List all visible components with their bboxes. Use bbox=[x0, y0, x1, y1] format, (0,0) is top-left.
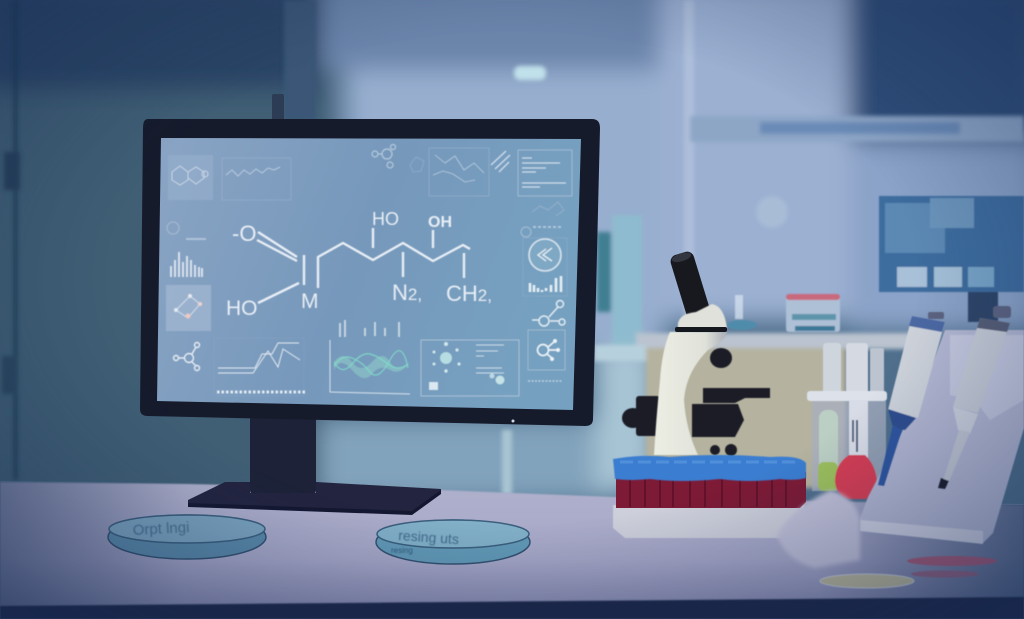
pipette left bbox=[878, 312, 945, 486]
dish label: resing uts bbox=[398, 527, 459, 547]
petri dish left bbox=[108, 515, 266, 559]
left screen widgets bbox=[166, 155, 291, 370]
microscope bbox=[622, 250, 770, 456]
petri dish right bbox=[376, 520, 530, 564]
molecule labels: HO bbox=[226, 297, 258, 320]
monitor bbox=[140, 119, 600, 426]
table bbox=[0, 482, 1024, 619]
top screen widgets bbox=[372, 144, 572, 216]
bottom screen charts bbox=[214, 320, 519, 396]
dish side label: resing bbox=[391, 546, 413, 555]
chemical structure bbox=[226, 209, 492, 320]
molecule labels: M bbox=[301, 290, 318, 313]
monitor frame bbox=[140, 119, 600, 426]
network panel bbox=[421, 340, 519, 396]
pipette stand bbox=[860, 330, 1024, 544]
molecule labels: CH2, bbox=[446, 281, 492, 306]
red samples bbox=[616, 472, 806, 508]
molecule bonds bbox=[257, 228, 470, 303]
monitor stand bbox=[188, 415, 441, 515]
dish label: Orpt lngi bbox=[132, 519, 190, 539]
power light bbox=[512, 420, 514, 422]
molecule labels: N2, bbox=[392, 280, 422, 305]
white cloth bbox=[777, 490, 860, 568]
blue caps bbox=[613, 455, 806, 481]
test tubes rack bbox=[807, 343, 887, 499]
molecule labels: -O bbox=[232, 221, 256, 246]
molecule labels: HO bbox=[372, 209, 399, 229]
molecule labels: OH bbox=[428, 214, 452, 231]
molecule labels bbox=[226, 209, 492, 320]
wall display: right background monitor bbox=[879, 196, 1024, 322]
microscope body bbox=[654, 332, 727, 455]
microscope black parts bbox=[622, 348, 770, 456]
line chart bbox=[214, 338, 305, 396]
wave chart bbox=[330, 320, 410, 394]
shelf items: background containers bbox=[727, 294, 840, 332]
monitor screen bbox=[157, 138, 581, 410]
microscope eyepiece bbox=[669, 250, 712, 324]
monitor stand post bbox=[272, 94, 284, 124]
right screen widgets bbox=[521, 227, 567, 381]
blood sample tray bbox=[613, 455, 806, 538]
tray base bbox=[613, 505, 805, 538]
microscope head bbox=[678, 304, 727, 328]
paper discs on table bbox=[820, 556, 997, 588]
pipette right bbox=[938, 306, 1011, 489]
